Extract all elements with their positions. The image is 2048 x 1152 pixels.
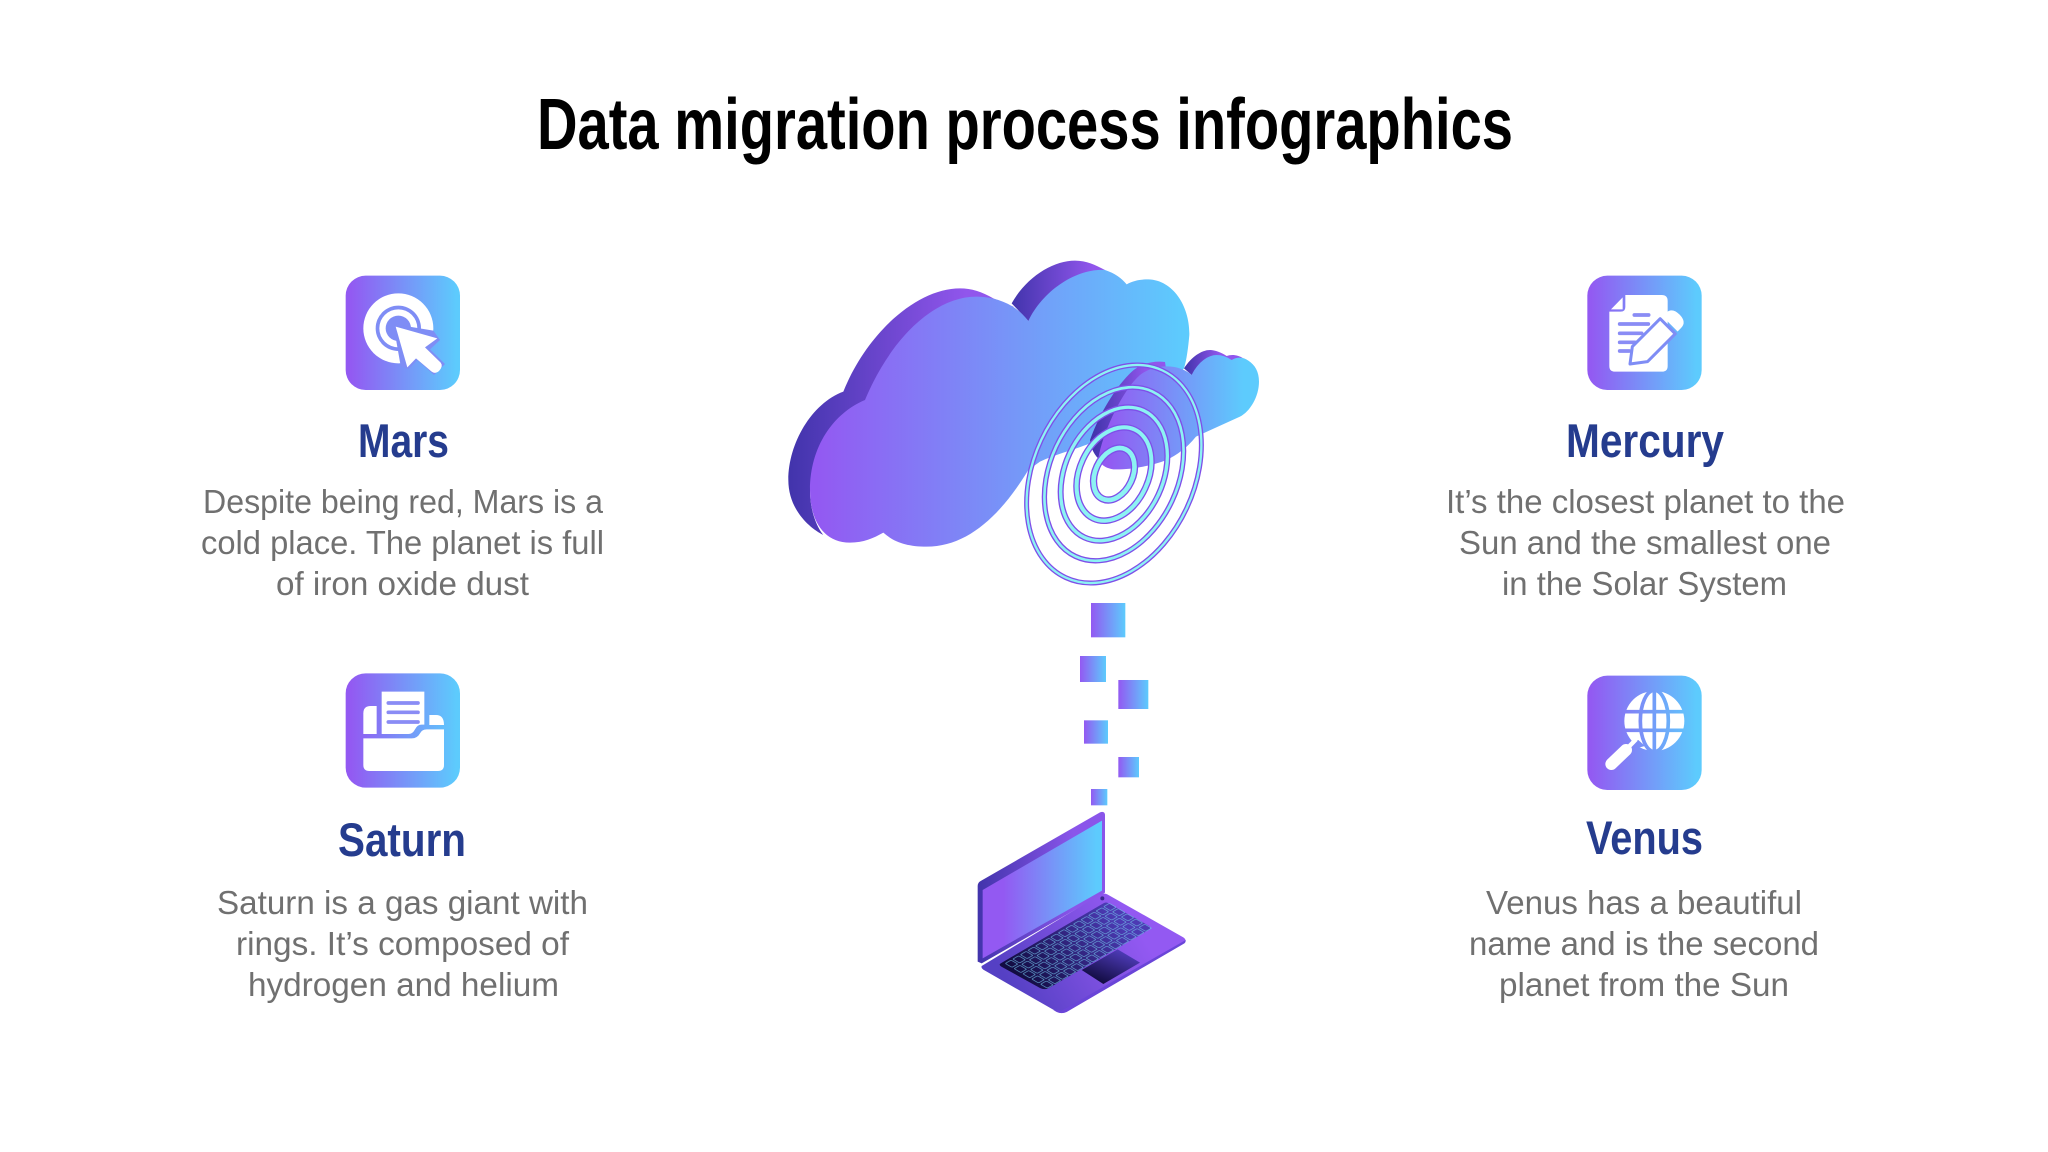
panel: Saturn xyxy=(217,673,588,1004)
description: Mercury: in the Solar System xyxy=(1502,566,1787,603)
heading: Mars: Mars xyxy=(358,414,449,467)
description: Mercury: It’s the closest planet to the xyxy=(1446,484,1845,521)
icon: folder with document xyxy=(346,673,460,788)
illustration: cloud with concentric rings xyxy=(788,261,1259,612)
description: Venus: name and is the second xyxy=(1469,926,1819,963)
small cloud xyxy=(1090,350,1259,469)
description: Venus xyxy=(1469,885,1819,1004)
description: Mars: of iron oxide dust xyxy=(276,566,530,603)
rings xyxy=(993,336,1235,612)
main cloud xyxy=(810,270,1189,547)
laptop xyxy=(978,812,1186,1013)
description: Mars xyxy=(201,484,604,603)
description: Venus: planet from the Sun xyxy=(1499,967,1789,1004)
heading: Venus: Venus xyxy=(1586,811,1703,864)
panel: Mercury xyxy=(1446,276,1845,603)
panel: Mars xyxy=(201,276,604,603)
description: Saturn: rings. It’s composed of xyxy=(236,926,570,963)
description: Mercury: Sun and the smallest one xyxy=(1459,525,1831,562)
illustration: migrating data squares and laptop xyxy=(978,603,1186,1013)
heading: Saturn: Saturn xyxy=(338,813,466,866)
icon: target and cursor xyxy=(346,276,460,390)
icon: document and pencil xyxy=(1587,276,1702,390)
icon: globe with magnifier xyxy=(1587,676,1702,790)
description: Saturn: Saturn is a gas giant with xyxy=(217,885,588,922)
description: Mars: Despite being red, Mars is a xyxy=(203,484,603,521)
description: Saturn: hydrogen and helium xyxy=(248,967,559,1004)
description: Venus: Venus has a beautiful xyxy=(1486,885,1802,922)
heading: Mercury: Mercury xyxy=(1566,414,1724,467)
description: Mercury xyxy=(1446,484,1845,603)
data squares xyxy=(1080,603,1148,805)
title: Data migration process infographics xyxy=(537,85,1513,165)
description: Saturn xyxy=(217,885,588,1004)
panel: Venus xyxy=(1469,676,1819,1004)
description: Mars: cold place. The planet is full xyxy=(201,525,604,562)
